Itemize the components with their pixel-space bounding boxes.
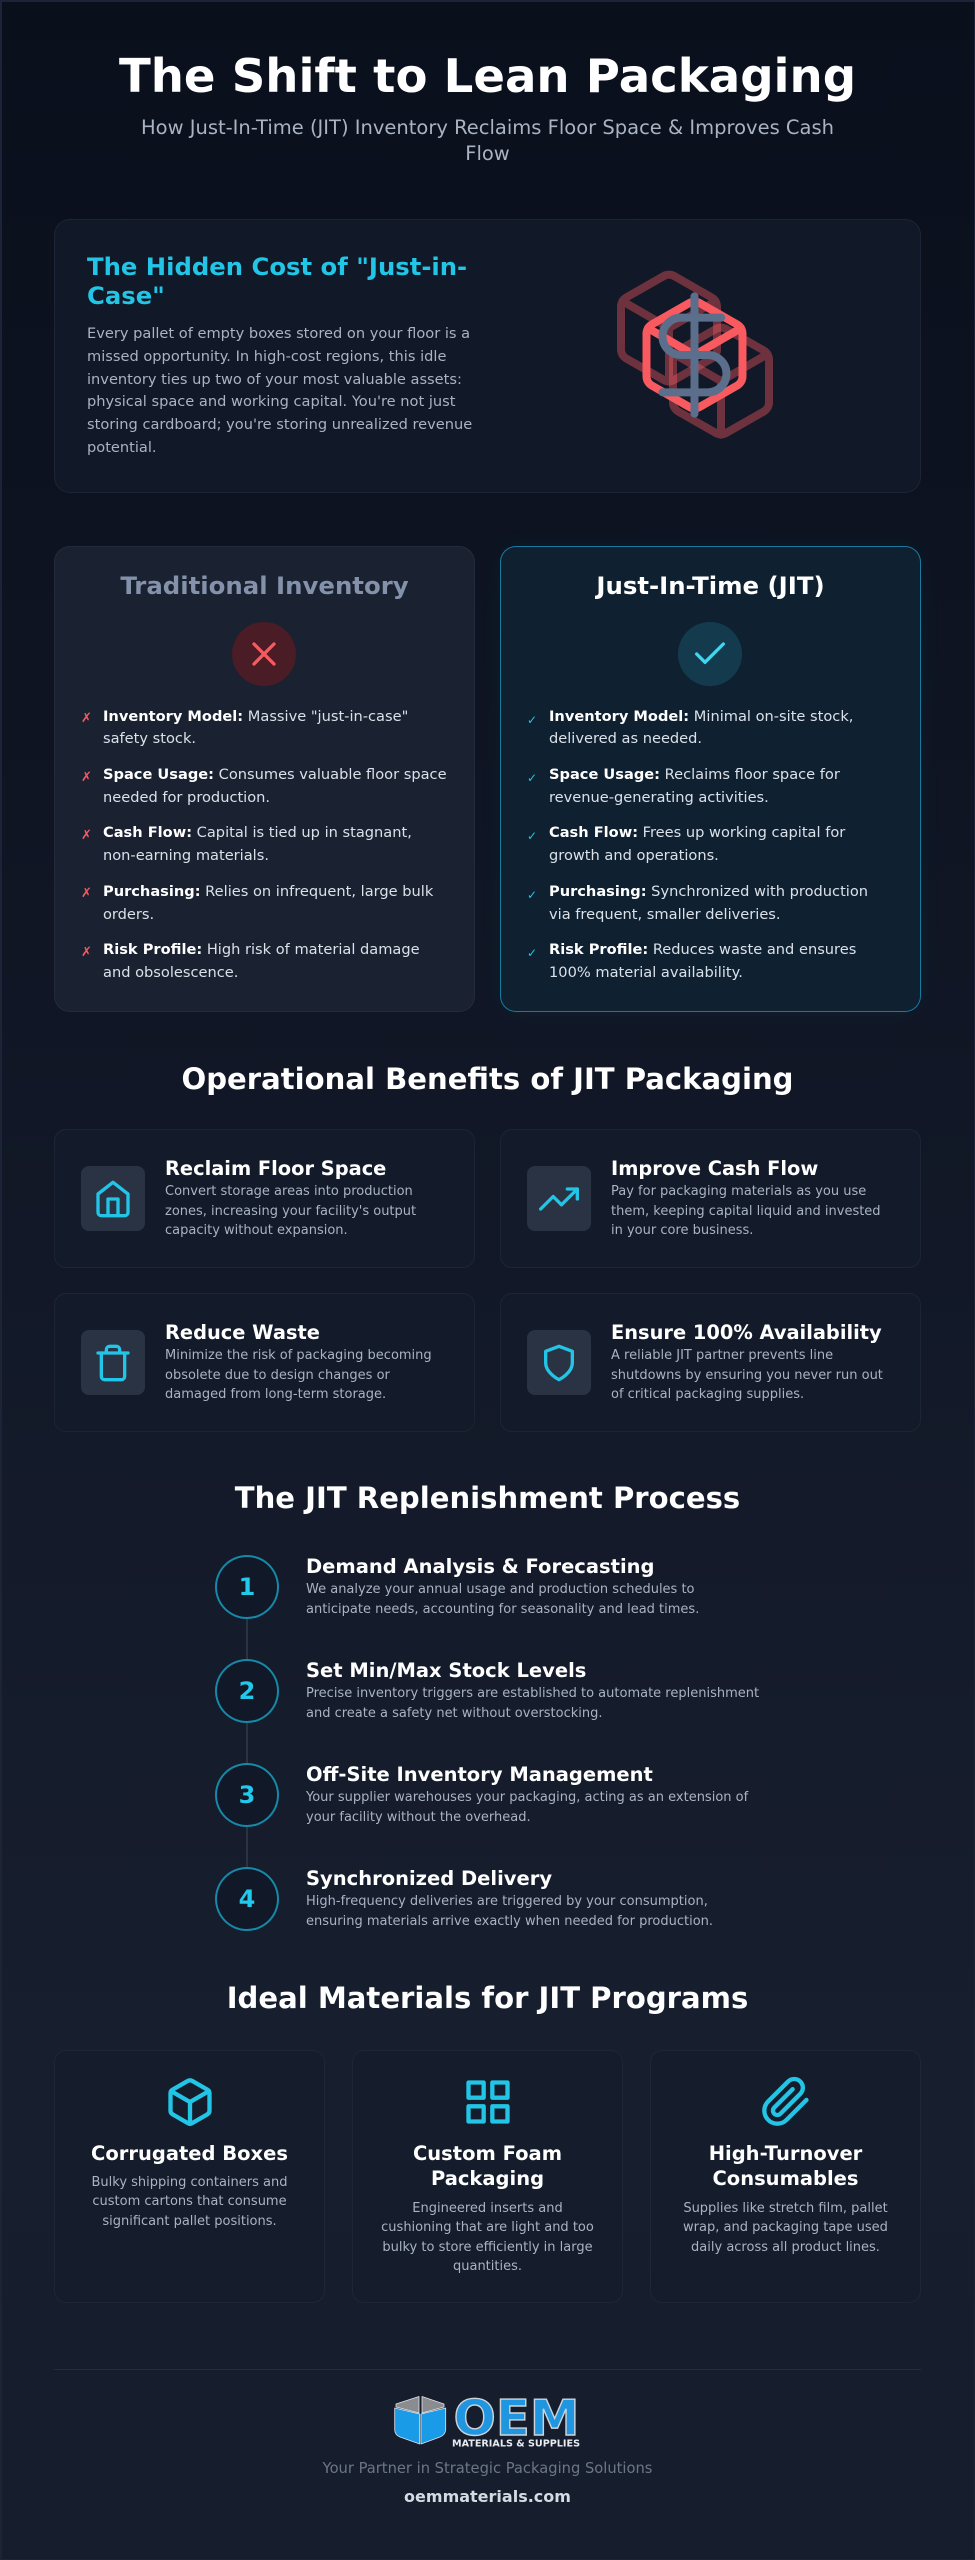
list item: purchasing: ✗ [81,886,92,901]
icon: home [81,1166,145,1231]
connector [246,1827,248,1867]
icon: paperclip [762,2076,809,2126]
benefit title: Improve Cash Flow [611,1157,818,1180]
list item: cash flow: non-earning materials. [103,847,269,864]
benefit text: of critical packaging supplies. [611,1387,804,1402]
panel: reduce waste [54,1293,475,1432]
step title: Synchronized Delivery [306,1867,552,1890]
material text: custom cartons that consume [92,2194,287,2209]
list item: risk profile [527,941,856,981]
heading: jit: Just-In-Time (JIT) [596,571,825,600]
step text: your facility without the overhead. [306,1810,531,1824]
list item: space usage: ✓ [527,771,537,785]
list item: risk profile: 100% material availability. [549,964,743,981]
benefit text [611,1184,881,1238]
icon: shield [527,1330,591,1395]
list item: risk profile: ✓ [527,946,537,960]
material text: wrap, and packaging tape used [683,2220,888,2235]
connector [246,1723,248,1763]
list item: purchasing: orders. [103,906,154,922]
icon: dollar sign [662,296,726,414]
heading: hidden cost [87,252,467,310]
list item: space usage: Space Usage: Consumes valuable floor space [103,766,447,783]
benefit text: damaged from long-term storage. [165,1387,386,1402]
step text [306,1582,699,1616]
panel: high-turnover consumables [650,2050,921,2303]
step text: Precise inventory triggers are established to automate replenishment [306,1686,759,1701]
list item: inventory model [81,708,408,747]
timeline: process steps [215,1555,759,1931]
step 2 [215,1659,759,1723]
benefit text [165,1348,432,1402]
text: hidden cost body: Every pallet of empty boxes stored on your floor is a [87,325,470,342]
benefit title: Reclaim Floor Space [165,1157,386,1180]
benefit text: zones, increasing your facility's output [165,1204,416,1219]
icon: boxes with dollar sign [617,270,773,439]
footer [54,2369,921,2514]
step title: Set Min/Max Stock Levels [306,1659,586,1682]
material text [381,2201,594,2274]
material title: Custom Foam [413,2142,562,2164]
step text: anticipate needs, accounting for seasonality and lead times. [306,1602,699,1616]
panel: reclaim floor space [54,1129,475,1268]
heading: replenishment process: The JIT Replenishment Process [235,1481,740,1515]
logo tagline: MATERIALS & SUPPLIES [452,2438,580,2449]
panel: hidden cost [54,219,921,493]
list item: inventory model: delivered as needed. [549,730,702,747]
list item: inventory model: ✗ [81,711,92,726]
list item: risk profile: ✗ [81,945,92,960]
material text: Supplies like stretch film, pallet [683,2201,888,2216]
heading: hidden cost: Case" [87,280,165,310]
subtitle: Flow [465,142,510,165]
list item: cash flow: ✗ [81,828,92,843]
list item: cash flow: Cash Flow: Frees up working capital for [549,824,845,841]
material text: bulky to store efficiently in large [382,2240,593,2255]
icon: trending up [527,1166,591,1231]
material title [413,2142,562,2190]
benefit title: Reduce Waste [165,1321,320,1344]
list item: purchasing: Purchasing: Synchronized with production [549,883,868,900]
text: hidden cost body: missed opportunity. In high-cost regions, this idle [87,348,446,365]
list item: risk profile: Risk Profile: Reduces waste and ensures [549,941,856,958]
step text [306,1894,713,1928]
material text: daily across all product lines. [691,2240,880,2255]
icon: red x circle [232,622,296,686]
panel: corrugated boxes [54,2050,325,2303]
icon: back right box [673,328,769,435]
icon: trash [81,1330,145,1395]
step text: High-frequency deliveries are triggered by your consumption, [306,1894,708,1909]
icon: back left box [621,275,717,382]
list item: inventory model [527,708,853,747]
step text: and create a safety net without overstocking. [306,1706,603,1720]
list item: inventory model: Inventory Model: Minimal on-site stock, [549,708,853,725]
subtitle: How Just-In-Time (JIT) Inventory Reclaims Floor Space & Improves Cash [141,116,834,139]
step text: We analyze your annual usage and production schedules to [306,1582,695,1597]
heading: operational benefits: Operational Benefits of JIT Packaging [182,1062,794,1096]
benefit text: A reliable JIT partner prevents line [611,1348,833,1363]
material text: quantities. [453,2259,522,2274]
step number: 2 [239,1677,255,1705]
heading: ideal materials: Ideal Materials for JIT Programs [227,1981,748,2015]
step 4 [215,1867,713,1931]
list item: cash flow: Cash Flow: Capital is tied up in stagnant, [103,824,412,841]
text: hidden cost body [87,325,472,456]
icon: front box [646,302,742,409]
step text [306,1686,759,1720]
benefit text: obsolete due to design changes or [165,1368,390,1383]
text: hidden cost body: physical space and working capital. You're not just [87,393,455,410]
step number: 3 [239,1781,255,1809]
list item: space usage [527,766,840,806]
list item: space usage: ✗ [81,770,92,784]
list item: space usage: Space Usage: Reclaims floor space for [549,766,840,783]
icon: cyan check circle [678,622,742,686]
list item: purchasing: ✓ [527,888,537,902]
material title: High-Turnover [709,2142,862,2164]
list item: inventory model: Inventory Model: Massive "just-in-case" [103,708,408,725]
step title: Off-Site Inventory Management [306,1763,653,1786]
list item: risk profile: and obsolescence. [103,964,238,981]
list item: cash flow [81,824,412,864]
benefit text: Minimize the risk of packaging becoming [165,1348,432,1363]
heading: hidden cost: The Hidden Cost of "Just-in- [87,252,467,280]
benefit text: Convert storage areas into production [165,1184,413,1199]
benefit text: them, keeping capital liquid and invested [611,1204,881,1219]
benefit title: Ensure 100% Availability [611,1321,882,1344]
panel: ensure availability [500,1293,921,1432]
list item: inventory model: ✓ [527,713,537,727]
text: hidden cost body: inventory ties up two of your most valuable assets: [87,371,462,388]
connector [246,1619,248,1659]
text: hidden cost body: potential. [87,439,157,456]
benefit text: shutdowns by ensuring you never run out [611,1368,883,1383]
list item: risk profile: Risk Profile: High risk of material damage [103,941,420,958]
material title: Consumables [712,2167,859,2190]
panel: traditional inventory [54,546,475,1012]
step number [215,1555,279,1619]
panel: improve cash flow [500,1129,921,1268]
list item: inventory model: safety stock. [103,730,196,747]
website: oemmaterials.com [404,2486,571,2506]
panel: just-in-time [500,546,921,1012]
step number: 1 [239,1573,255,1601]
title: The Shift to Lean Packaging [119,49,856,103]
benefit text: in your core business. [611,1223,753,1238]
benefit text [165,1184,416,1238]
list item: purchasing: via frequent, smaller deliveries. [549,906,781,922]
list item: cash flow: growth and operations. [549,847,719,864]
list item: space usage: needed for production. [103,789,270,806]
step 3 [215,1763,748,1827]
tagline: Your Partner in Strategic Packaging Solutions [323,2460,652,2477]
step number: 4 [239,1885,255,1913]
panel: custom foam packaging [352,2050,623,2303]
logo box [395,2396,446,2444]
material text: cushioning that are light and too [381,2220,594,2235]
step text: ensuring materials arrive exactly when needed for production. [306,1914,713,1928]
step number [215,1763,279,1827]
subtitle [141,116,834,165]
icon: box [168,2078,212,2126]
list item: purchasing: Purchasing: Relies on infrequent, large bulk [103,883,433,900]
heading: traditional: Traditional Inventory [120,571,409,600]
list item: risk profile [81,941,420,981]
material title: Packaging [431,2167,544,2190]
step number [215,1867,279,1931]
material text: Engineered inserts and [412,2201,563,2216]
logo: OEM materials and supplies [394,2396,580,2449]
icon: grid [466,2080,510,2124]
benefit text: Pay for packaging materials as you use [611,1184,866,1199]
list item: cash flow [527,824,846,864]
material text [683,2201,888,2255]
list item: cash flow: ✓ [527,829,537,843]
step title: Demand Analysis & Forecasting [306,1555,654,1578]
step 1 [215,1555,699,1619]
material title [709,2142,862,2190]
material text: significant pallet positions. [102,2214,277,2229]
material text: Bulky shipping containers and [92,2174,287,2190]
list item: purchasing [527,883,868,922]
list item: space usage: revenue-generating activities. [549,789,769,806]
material title: Corrugated Boxes [91,2142,288,2164]
step text [306,1790,748,1824]
benefit text: capacity without expansion. [165,1223,348,1238]
step number [215,1659,279,1723]
material text [92,2174,287,2229]
step text: Your supplier warehouses your packaging, acting as an extension of [306,1790,748,1805]
benefit text [611,1348,883,1402]
text: hidden cost body: storing cardboard; you're storing unrealized revenue [87,416,472,433]
list item: purchasing [81,883,434,922]
list item: space usage [81,766,447,806]
